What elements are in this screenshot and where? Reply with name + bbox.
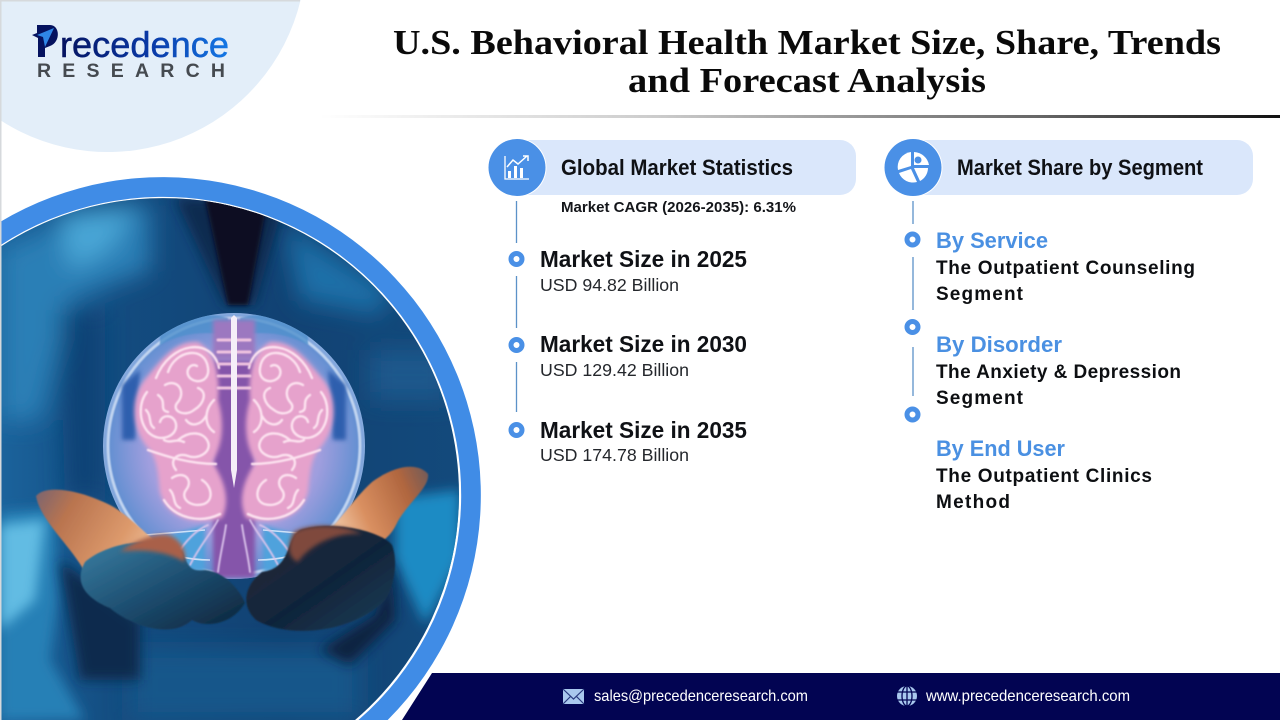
CAGR note: Market CAGR (2026-2035): 6.31% — [561, 199, 796, 216]
stat 2030: USD 129.42 Billion — [540, 360, 689, 380]
footer bar — [402, 673, 1280, 720]
title — [393, 23, 1221, 100]
photo: glowing brain held in hands — [0, 190, 470, 720]
header pill — [896, 140, 1253, 195]
stat 2025: USD 94.82 Billion — [540, 275, 679, 295]
header pill — [500, 140, 856, 195]
dark collar and tie — [175, 198, 285, 305]
page edge lines — [0, 0, 300, 720]
marker disorder — [907, 322, 918, 332]
left hand fingers — [81, 542, 245, 630]
brain right hemisphere — [236, 340, 334, 572]
timeline — [511, 201, 522, 436]
marker 2030 — [511, 340, 522, 350]
icon: growth chart — [488, 138, 546, 197]
segment: by end user: Method — [936, 492, 1010, 513]
marker 2035 — [511, 424, 522, 436]
header text: Market Share by Segment — [957, 155, 1204, 180]
icon: globe — [897, 686, 917, 706]
title: U.S. Behavioral Health Market Size, Share, Trends — [393, 23, 1221, 62]
segment: by disorder: By Disorder — [936, 332, 1062, 357]
brain left hemisphere — [134, 340, 232, 572]
dark cuffs — [60, 560, 140, 680]
segment: by service: By Service — [936, 228, 1048, 253]
segment: by disorder — [936, 332, 1181, 409]
marker end user — [907, 409, 918, 420]
marker service — [907, 234, 918, 245]
stat 2025 — [540, 246, 747, 295]
stat 2035: Market Size in 2035 — [540, 417, 747, 443]
glass globe — [103, 313, 365, 579]
right hand fingers — [246, 526, 395, 631]
segment: by service — [936, 228, 1195, 305]
segment: by end user — [936, 436, 1152, 513]
right sleeve — [395, 490, 460, 625]
logo — [32, 24, 229, 82]
logo mark: P with arrow — [32, 25, 58, 57]
logo wordmark: recedence — [60, 24, 229, 65]
title: and Forecast Analysis — [628, 61, 986, 100]
panel: global market statistics — [488, 138, 856, 465]
right hand palm — [333, 466, 429, 540]
stat 2035 — [540, 417, 747, 465]
timeline — [907, 201, 918, 420]
segment: by disorder: The Anxiety & Depression — [936, 362, 1181, 383]
footer email: sales@precedenceresearch.com — [594, 688, 808, 705]
coat shading — [0, 205, 450, 720]
left hand palm — [35, 488, 152, 569]
segment: by end user: By End User — [936, 436, 1065, 461]
panel: market share by segment — [884, 138, 1253, 513]
segment: by service: Segment — [936, 284, 1024, 305]
segment: by disorder: Segment — [936, 388, 1024, 409]
segment: by service: The Outpatient Counseling — [936, 258, 1195, 279]
stat 2025: Market Size in 2025 — [540, 246, 747, 272]
icon: pie chart with person — [884, 138, 942, 197]
marker 2025 — [511, 254, 522, 264]
left sleeve — [0, 508, 85, 720]
logo backdrop circle — [0, 0, 301, 152]
header text: Global Market Statistics — [561, 155, 793, 180]
footer website: www.precedenceresearch.com — [925, 688, 1130, 705]
stat 2035: USD 174.78 Billion — [540, 445, 689, 465]
stat 2030 — [540, 331, 747, 380]
icon: email — [563, 689, 584, 704]
stat 2030: Market Size in 2030 — [540, 331, 747, 357]
segment: by end user: The Outpatient Clinics — [936, 466, 1152, 487]
title divider — [320, 115, 1280, 118]
centre fissure — [231, 315, 237, 488]
logo subtitle: RESEARCH — [37, 60, 225, 82]
photo ring — [0, 177, 481, 720]
